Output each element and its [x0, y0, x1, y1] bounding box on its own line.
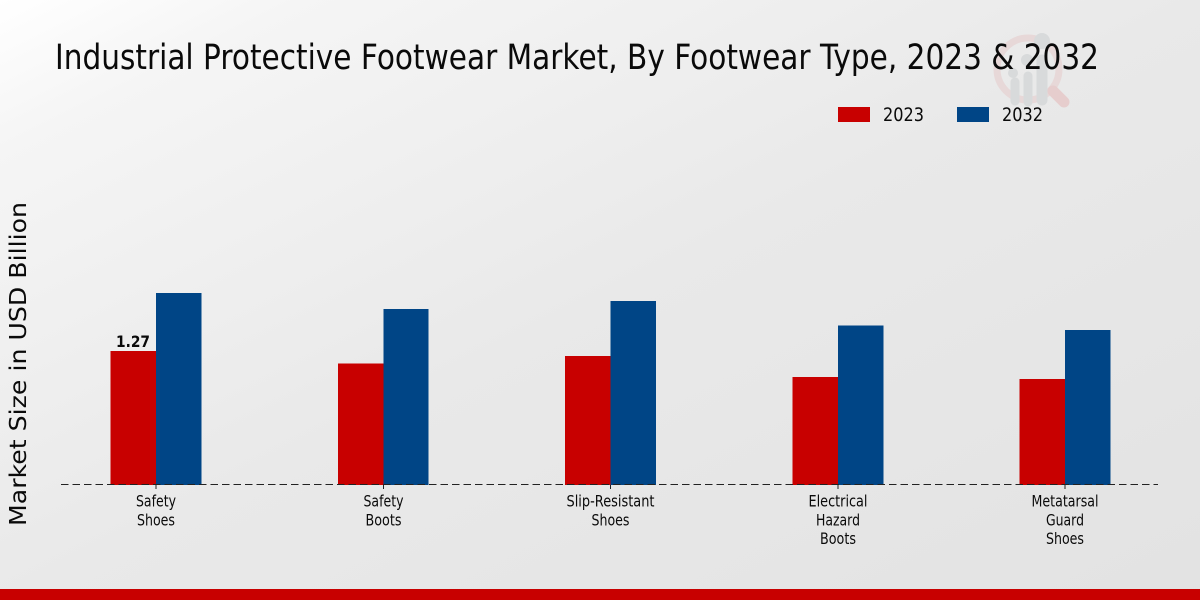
label: Electrical Hazard Boots: Electrical — [808, 492, 868, 510]
legend — [838, 104, 1043, 126]
footer bar — [0, 589, 1200, 600]
label: Safety Boots: Boots — [366, 510, 402, 530]
data label: 1.27 — [116, 332, 150, 351]
label: Safety Boots: Safety — [364, 492, 404, 510]
label: Safety Shoes — [136, 492, 176, 530]
group: Metatarsal Guard Shoes — [1020, 330, 1110, 485]
label: Metatarsal Guard Shoes: Metatarsal — [1032, 492, 1098, 510]
group: Electrical Hazard Boots — [792, 326, 884, 485]
label: Slip-Resistant Shoes: Slip-Resistant — [566, 492, 654, 510]
label: Slip-Resistant Shoes — [566, 492, 654, 530]
bar chart — [61, 293, 1158, 489]
group: Slip-Resistant Shoes — [565, 301, 656, 485]
group: Safety Boots — [338, 309, 428, 485]
baseline — [61, 484, 1158, 486]
group: Safety Shoes — [110, 293, 202, 485]
legend item: 2032: 2032 — [1002, 104, 1043, 126]
label: Safety Shoes: Safety — [136, 492, 176, 510]
label: Electrical Hazard Boots — [808, 492, 868, 548]
label: Metatarsal Guard Shoes: Guard — [1046, 510, 1084, 530]
label: Slip-Resistant Shoes: Shoes — [592, 510, 630, 530]
icon: watermark logo — [997, 33, 1064, 102]
label: Electrical Hazard Boots: Boots — [820, 529, 856, 548]
label: Safety Boots — [364, 492, 404, 530]
y axis label: Market Size in USD Billion — [6, 202, 32, 526]
label: Metatarsal Guard Shoes: Shoes — [1046, 529, 1084, 548]
label: Electrical Hazard Boots: Hazard — [816, 510, 860, 530]
label: Metatarsal Guard Shoes — [1032, 492, 1098, 548]
legend item: 2023 — [838, 104, 924, 126]
x axis labels — [136, 492, 1098, 548]
legend item: 2023: 2023 — [883, 104, 924, 126]
legend item: 2032 — [957, 104, 1043, 126]
label: Safety Shoes: Shoes — [137, 510, 175, 530]
